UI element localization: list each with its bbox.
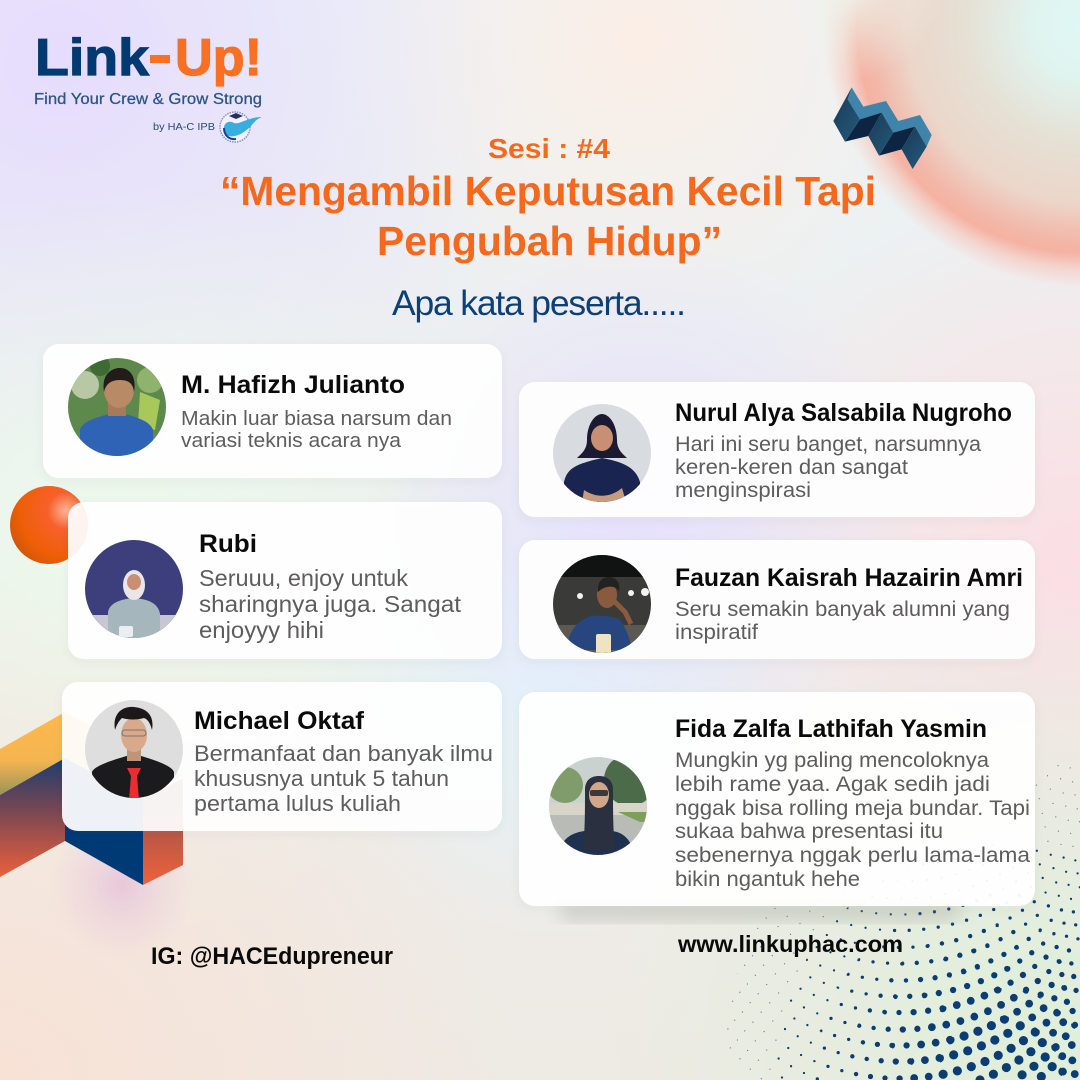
card: Nurul Alya Salsabila Nugroho (519, 382, 1035, 517)
card: Michael Oktaf: Michael Oktaf (194, 707, 365, 735)
instagram handle: IG: @HACEdupreneur (151, 943, 393, 970)
avatar: Rubi (85, 540, 183, 640)
card: Nurul Alya Salsabila Nugroho: keren-keren dan sangat (675, 456, 908, 479)
logo: Link (35, 29, 149, 87)
card: Rubi: Rubi (199, 530, 257, 558)
3D hexagon shape (0, 712, 183, 885)
card: Nurul Alya Salsabila Nugroho: Nurul Alya Salsabila Nugroho (675, 399, 1012, 427)
card: Fauzan Kaisrah Hazairin Amri (519, 540, 1035, 659)
card: Fauzan Kaisrah Hazairin Amri: Fauzan Kaisrah Hazairin Amri (675, 564, 1023, 592)
card: Fida Zalfa Lathifah Yasmin (519, 692, 1035, 906)
card: Rubi: enjoyyy hihi (199, 617, 324, 643)
card: Fida Zalfa Lathifah Yasmin: nggak bisa rolling meja bundar. Tapi (675, 797, 1030, 820)
card: Fauzan Kaisrah Hazairin Amri: Seru semakin banyak alumni yang (675, 598, 1010, 621)
card: Nurul Alya Salsabila Nugroho: menginspirasi (675, 479, 811, 502)
avatar: Nurul (553, 404, 651, 504)
card: Fida Zalfa Lathifah Yasmin: sukaa bahwa presentasi itu (675, 820, 943, 843)
logo: Up! (175, 29, 262, 87)
card: Michael Oktaf: khususnya untuk 5 tahun (194, 766, 449, 791)
card: M. Hafizh Julianto: variasi teknis acara nya (181, 430, 402, 452)
card: Fida Zalfa Lathifah Yasmin: lebih rame yaa. Agak sedih jadi (675, 773, 990, 796)
card: M. Hafizh Julianto (43, 344, 502, 478)
card: Fida Zalfa Lathifah Yasmin: Fida Zalfa Lathifah Yasmin (675, 715, 987, 743)
logo (34, 29, 262, 142)
card: Michael Oktaf: pertama lulus kuliah (194, 791, 401, 816)
avatar: Michael (85, 700, 183, 800)
halftone dot pattern (727, 765, 1080, 1080)
card: Fida Zalfa Lathifah Yasmin: Mungkin yg paling mencoloknya (675, 749, 989, 772)
title: “Mengambil Keputusan Kecil Tapi (220, 168, 876, 214)
avatar: Fida (549, 757, 647, 855)
logo: Find Your Crew & Grow Strong (34, 91, 262, 108)
card: Nurul Alya Salsabila Nugroho: Hari ini seru banget, narsumnya (675, 433, 981, 456)
session label: Sesi : #4 (488, 133, 610, 164)
card: Rubi: sharingnya juga. Sangat (199, 591, 462, 617)
3D zigzag shape (833, 87, 932, 169)
card: Fida Zalfa Lathifah Yasmin: bikin ngantuk hehe (675, 868, 860, 891)
card: Rubi (68, 502, 502, 659)
logo: by HA-C IPB (153, 121, 215, 133)
corner blob: salmon glow (818, 0, 1080, 287)
card: Rubi: Seruuu, enjoy untuk (199, 565, 409, 591)
title (220, 168, 876, 264)
card: Fida Zalfa Lathifah Yasmin: sebenernya nggak perlu lama-lama (675, 844, 1030, 867)
card: Michael Oktaf: Bermanfaat dan banyak ilmu (194, 741, 493, 766)
card: M. Hafizh Julianto: Makin luar biasa narsum dan (181, 408, 452, 430)
card shadow (560, 900, 960, 922)
subtitle: Apa kata peserta..... (392, 283, 686, 323)
card: Michael Oktaf (62, 682, 502, 831)
title: Pengubah Hidup” (377, 218, 722, 264)
card: M. Hafizh Julianto: M. Hafizh Julianto (181, 371, 405, 399)
website: www.linkuphac.com (677, 931, 903, 957)
avatar: M. Hafizh (68, 356, 166, 460)
orange sphere (10, 486, 88, 564)
pink glow (50, 810, 194, 960)
card: Fauzan Kaisrah Hazairin Amri: inspiratif (675, 621, 758, 644)
avatar: Fauzan (553, 555, 651, 655)
